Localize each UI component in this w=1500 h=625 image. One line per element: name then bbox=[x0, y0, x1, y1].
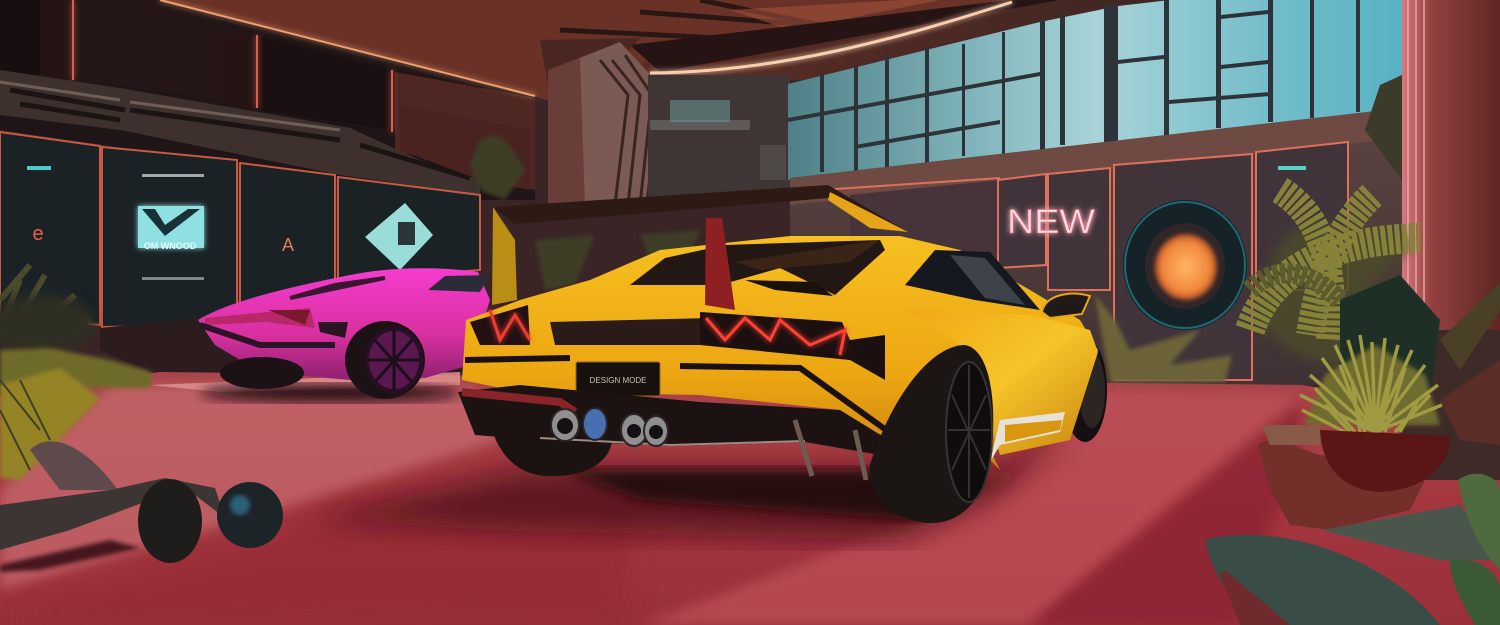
black stripes bbox=[465, 358, 570, 360]
floor carpet bbox=[0, 372, 1500, 625]
pink car bbox=[198, 268, 490, 402]
cabin glass bbox=[905, 250, 1040, 310]
exhausts bbox=[551, 408, 668, 446]
panel logos: OM WNOOD bbox=[144, 241, 197, 251]
yellow car bbox=[300, 185, 1107, 540]
yellow car: DESIGN MODE bbox=[590, 376, 646, 385]
ceiling neon strips bbox=[73, 0, 1012, 132]
left wall neon panels bbox=[0, 132, 480, 327]
left plants bbox=[0, 265, 152, 480]
spoiler bbox=[493, 185, 908, 232]
icon: glowing orange orb bbox=[1123, 200, 1247, 330]
mid plant at back wall bbox=[1095, 295, 1232, 382]
background plants bbox=[470, 135, 700, 290]
panel logos: e bbox=[32, 223, 44, 245]
side body bbox=[905, 310, 1098, 455]
main body bbox=[462, 236, 1098, 470]
rear bumper bbox=[458, 385, 905, 455]
right wall with neon panels bbox=[790, 108, 1402, 385]
grass in pot bbox=[1305, 345, 1440, 425]
side mirror bbox=[1042, 294, 1090, 318]
windows bbox=[788, 0, 1402, 180]
rear deck black grille bbox=[550, 318, 710, 345]
dumbbells and stand bottom left bbox=[0, 441, 283, 572]
ceiling beams bbox=[40, 0, 1060, 110]
wall base bbox=[100, 290, 480, 372]
panel logos bbox=[27, 166, 433, 280]
car shadow bbox=[300, 430, 1080, 540]
right plants bbox=[1250, 75, 1500, 480]
left wall shelving bbox=[0, 70, 530, 195]
tail lights bbox=[700, 312, 885, 380]
front far wheel bbox=[1063, 338, 1107, 442]
rear right tyre bbox=[870, 345, 993, 523]
concrete column bbox=[548, 42, 790, 205]
plate bbox=[576, 362, 660, 396]
rear left tyre bbox=[490, 420, 612, 476]
neon sign: NEW: NEW bbox=[1007, 203, 1095, 241]
panel logos: A bbox=[282, 235, 294, 255]
right pillar bbox=[1402, 0, 1500, 330]
foreground leaves bbox=[1205, 474, 1500, 625]
potted plant bbox=[1258, 425, 1450, 530]
